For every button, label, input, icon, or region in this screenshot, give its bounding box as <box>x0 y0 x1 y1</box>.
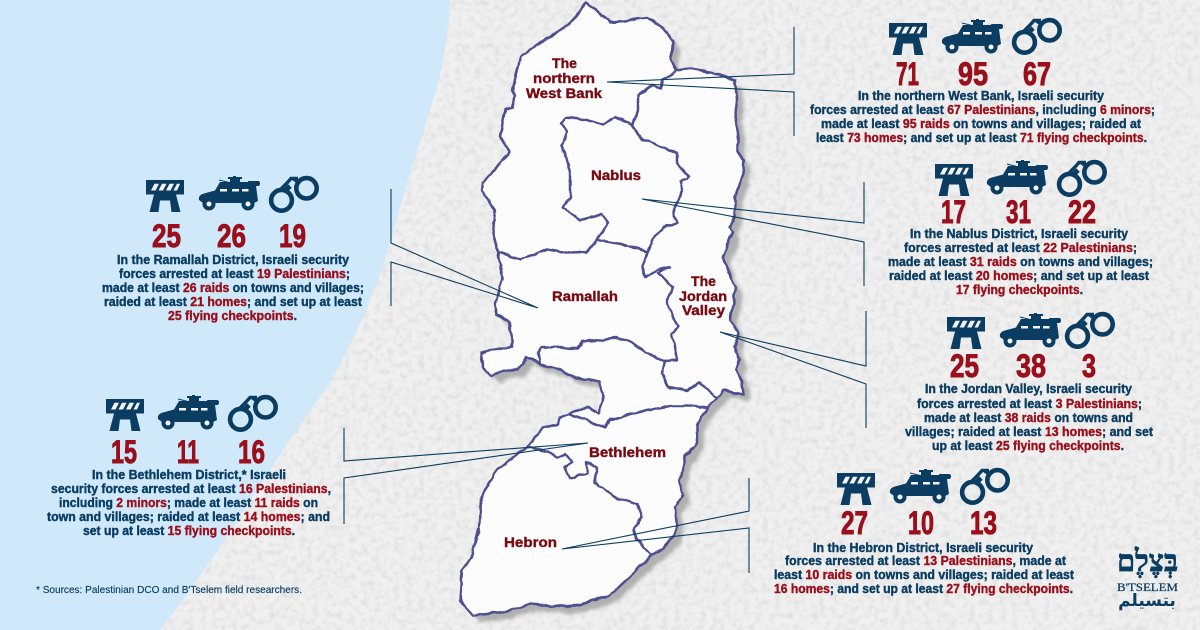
text block: In the Nablus District, Israeli security <box>910 227 1128 241</box>
statistics: 17 <box>941 194 966 230</box>
label: Hebron: Hebron <box>504 534 557 550</box>
statistics: 10 <box>908 505 934 541</box>
panel: Nablus <box>888 160 1153 297</box>
icon: handcuffs <box>230 397 276 430</box>
icon: barrier <box>106 399 144 431</box>
text block: forces arrested at least 67 Palestinians, including 6 minors; <box>810 103 1155 117</box>
statistics: 22 <box>1068 194 1096 230</box>
statistics <box>950 348 1096 384</box>
icon: barrier <box>146 180 184 212</box>
statistics: 67 <box>1023 56 1051 92</box>
text block: set up at least 15 flying checkpoints. <box>83 524 295 538</box>
map shadow <box>467 10 751 622</box>
icon: barrier <box>935 164 973 196</box>
text block: town and villages; raided at least 14 homes; and <box>47 510 330 524</box>
icon: military vehicle <box>942 19 1003 52</box>
statistics: 31 <box>1006 194 1031 230</box>
label: Jordan Valley: The <box>691 273 716 289</box>
statistics <box>111 434 265 470</box>
text block: villages; raided at least 13 homes; and set <box>905 425 1154 439</box>
label: Nablus: Nablus <box>591 167 641 183</box>
icon: military vehicle <box>1000 313 1061 346</box>
map outline <box>460 3 744 615</box>
text block: raided at least 21 homes; and set up at least <box>104 295 363 309</box>
panel: Bethlehem <box>47 395 331 538</box>
statistics: 11 <box>177 434 199 470</box>
text block: made at least 31 raids on towns and villages; <box>888 255 1153 269</box>
icon: barrier <box>947 317 985 349</box>
statistics: 3 <box>1082 348 1096 384</box>
text block: forces arrested at least 22 Palestinians; <box>904 241 1137 255</box>
label: northern West Bank: West Bank <box>526 85 602 101</box>
text block: least 10 raids on towns and villages; raided at least <box>774 568 1075 582</box>
statistics <box>841 505 997 541</box>
icon: barrier <box>837 473 875 505</box>
map labels <box>504 55 727 550</box>
label: Jordan Valley <box>679 273 727 318</box>
panel: Jordan Valley <box>905 313 1154 453</box>
icon: handcuffs <box>1067 314 1113 347</box>
label: northern West Bank: northern <box>533 70 595 86</box>
statistics: 27 <box>841 505 868 541</box>
text block: 16 homes; and set up at least 27 flying checkpoints. <box>774 582 1073 596</box>
statistics: 38 <box>1016 348 1046 384</box>
icon: military vehicle <box>890 469 951 502</box>
text block: In the northern West Bank, Israeli security <box>858 89 1104 103</box>
statistics <box>941 194 1096 230</box>
statistics: 95 <box>958 56 988 92</box>
text block: made at least 26 raids on towns and villages; <box>102 281 364 295</box>
statistics <box>896 56 1051 92</box>
icon: military vehicle <box>987 160 1048 192</box>
label: northern West Bank <box>526 55 602 101</box>
label: Bethlehem: Bethlehem <box>589 444 666 460</box>
logo: B'Tselem <box>1117 545 1178 611</box>
text block: In the Bethlehem District,* Israeli <box>92 468 286 482</box>
footnote: sources: * Sources: Palestinian DCO and B'Tselem field researchers. <box>36 584 302 596</box>
statistics: 16 <box>238 434 265 470</box>
text block: forces arrested at least 19 Palestinians; <box>119 267 350 281</box>
statistics <box>152 218 306 254</box>
icon: handcuffs <box>962 470 1008 503</box>
leader lines <box>344 27 866 573</box>
icon: handcuffs <box>1014 20 1060 53</box>
text block <box>102 253 364 323</box>
statistics: 15 <box>111 434 137 470</box>
text block: including 2 minors; made at least 11 raids on <box>59 496 318 510</box>
text block: up at least 25 flying checkpoints. <box>932 439 1124 453</box>
logo: B'Tselem: בְּצֶלֶם <box>1117 545 1178 578</box>
text block: 17 flying checkpoints. <box>956 283 1083 297</box>
text block <box>905 382 1154 453</box>
logo: B'Tselem: B'TSELEM <box>1117 582 1178 594</box>
label: Jordan Valley: Valley <box>682 302 725 318</box>
logo: B'Tselem: بتسيلم <box>1118 591 1176 611</box>
text block <box>810 89 1155 145</box>
icon: military vehicle <box>199 176 260 208</box>
statistics: 19 <box>279 218 306 254</box>
icon: handcuffs <box>1059 162 1105 195</box>
statistics: 25 <box>950 348 979 384</box>
label: northern West Bank: The <box>552 55 577 71</box>
text block: raided at least 20 homes; and set up at least <box>889 269 1150 283</box>
text block: In the Ramallah District, Israeli security <box>117 253 349 267</box>
text block: forces arrested at least 3 Palestinians; <box>917 397 1142 411</box>
icon: handcuffs <box>271 178 317 211</box>
statistics: 13 <box>970 505 997 541</box>
label: Jordan Valley: Jordan <box>679 288 727 304</box>
label: Ramallah: Ramallah <box>552 288 618 304</box>
text block: In the Jordan Valley, Israeli security <box>925 382 1132 396</box>
text block <box>774 541 1075 596</box>
text block: made at least 38 raids on towns and <box>924 411 1133 425</box>
text block <box>888 227 1153 297</box>
panel: Hebron <box>774 469 1075 596</box>
text block: In the Hebron District, Israeli security <box>813 541 1033 555</box>
text block: least 73 homes; and set up at least 71 flying checkpoints. <box>816 131 1147 145</box>
text block: made at least 95 raids on towns and villages; raided at <box>821 117 1142 131</box>
district borders <box>498 71 717 555</box>
icon: barrier <box>889 23 927 55</box>
sea: light blue area <box>0 0 450 630</box>
panel: Ramallah <box>102 176 364 323</box>
panel: northern West Bank <box>810 19 1155 145</box>
map: West Bank districts <box>460 3 751 622</box>
text block <box>47 468 331 538</box>
statistics: 26 <box>217 218 246 254</box>
text block: 25 flying checkpoints. <box>168 309 297 323</box>
text block: security forces arrested at least 16 Palestinians, <box>51 482 331 496</box>
statistics: 71 <box>896 56 919 92</box>
text block: forces arrested at least 13 Palestinians, made at <box>785 554 1067 568</box>
icon: military vehicle <box>158 395 219 428</box>
statistics: 25 <box>152 218 181 254</box>
